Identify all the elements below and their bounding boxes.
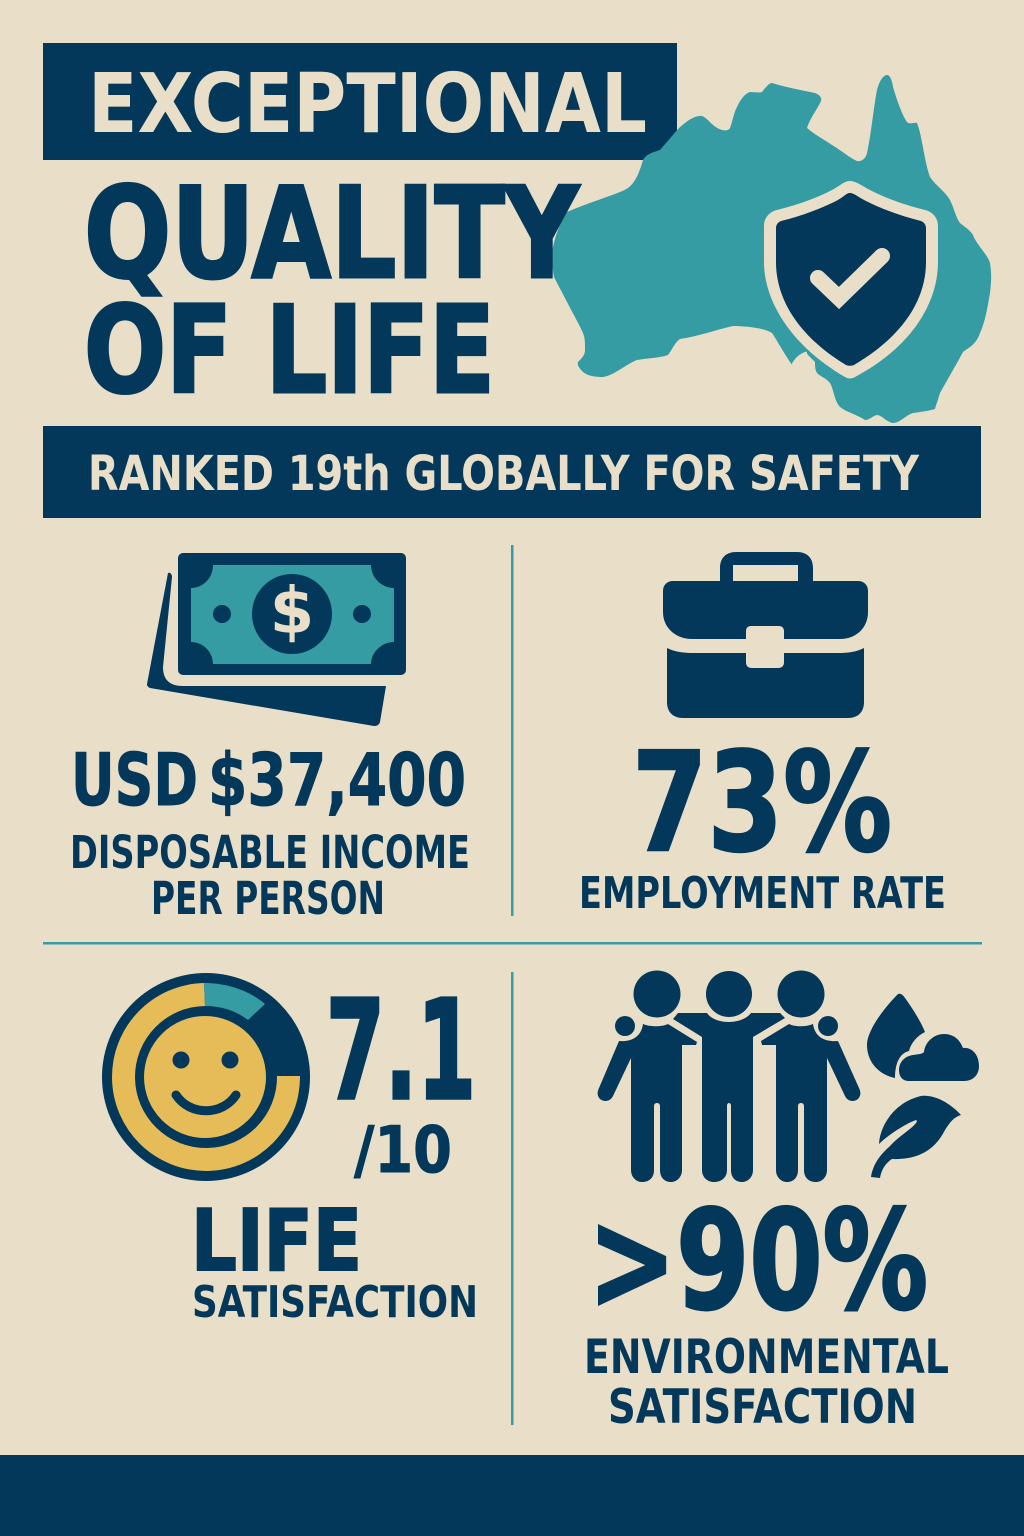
title: QUALITY OF LIFE xyxy=(84,160,580,421)
panel: employment xyxy=(579,552,946,919)
panel: life satisfaction xyxy=(102,972,478,1328)
panel: environmental satisfaction xyxy=(584,970,979,1435)
icon: leaf xyxy=(871,1096,961,1178)
income figure xyxy=(71,738,466,822)
satisfaction score: /10 xyxy=(354,1114,452,1188)
icon: banknotes xyxy=(147,553,406,726)
icon: three people xyxy=(598,970,860,1182)
map of Australia with shield xyxy=(552,75,991,423)
environment label: SATISFACTION xyxy=(608,1380,917,1435)
icon: banknotes: $ xyxy=(270,575,314,649)
income figure: USD xyxy=(71,738,198,822)
environment figure: >90% xyxy=(588,1182,928,1341)
title banner: EXCEPTIONAL: EXCEPTIONAL xyxy=(88,57,647,152)
safety ranking banner xyxy=(43,426,981,518)
environment label xyxy=(584,1330,949,1435)
income figure: $37,400 xyxy=(208,738,466,822)
title: QUALITY OF LIFE: QUALITY xyxy=(84,160,580,307)
income label: PER PERSON xyxy=(151,872,385,925)
footer bar xyxy=(0,1455,1024,1536)
employment figure: 73% xyxy=(632,724,892,883)
dividers xyxy=(43,545,982,1425)
icon: water drop and cloud xyxy=(867,994,979,1081)
satisfaction score: 7.1 xyxy=(326,972,476,1131)
icon: smiley gauge xyxy=(102,973,310,1181)
satisfaction score xyxy=(326,972,476,1188)
title: QUALITY OF LIFE: OF LIFE xyxy=(84,282,495,421)
icon: briefcase xyxy=(663,552,868,718)
satisfaction label: LIFE xyxy=(191,1192,362,1291)
panel: disposable income xyxy=(70,553,470,925)
satisfaction label: SATISFACTION xyxy=(192,1277,478,1328)
satisfaction label xyxy=(191,1192,478,1328)
income label: DISPOSABLE INCOME xyxy=(70,826,470,879)
income label xyxy=(70,826,470,925)
icon: shield with check xyxy=(764,181,938,378)
